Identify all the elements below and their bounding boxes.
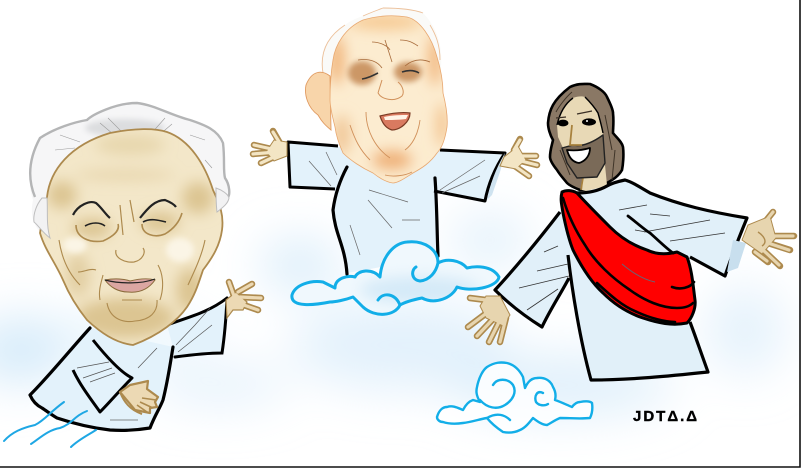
left robe trailing wind lines (4, 402, 96, 447)
top man cheek lines (350, 112, 420, 176)
signature: JDTΔ.Δ (633, 408, 699, 425)
left hand on chest (120, 381, 158, 414)
Jesus left sleeve (495, 212, 569, 327)
top man body lines (333, 167, 438, 274)
top man mouth (380, 113, 410, 130)
Jesus nose (570, 125, 582, 145)
top man nose (378, 80, 403, 100)
Jesus beard (562, 135, 605, 178)
left man mouth (105, 279, 155, 292)
top man ear (306, 72, 331, 130)
top man robe (287, 143, 505, 273)
top man hair (321, 8, 441, 75)
top man right hand (500, 139, 537, 176)
left robe body (30, 303, 227, 430)
Jesus sash folds (563, 198, 694, 322)
left man eyes and bags (76, 213, 182, 241)
top man sleeve outline left (288, 142, 338, 189)
Jesus red sash (561, 191, 695, 324)
figure: left flying man (4, 103, 261, 447)
top man sleeve right (434, 150, 505, 201)
cloud: lower small cloud (437, 362, 592, 433)
left man nose (116, 200, 144, 262)
Jesus face (557, 96, 603, 148)
left hand raised (226, 282, 261, 318)
Jesus right sleeve (577, 180, 747, 276)
Jesus neck (582, 165, 607, 192)
left man chin wrinkles (59, 240, 205, 322)
top man eyes (362, 71, 419, 79)
top man left hand (253, 131, 287, 163)
hair: white with grey outline (30, 103, 229, 240)
Jesus eyes (558, 120, 568, 126)
face: top man (330, 16, 447, 183)
left folded sleeve (73, 340, 132, 412)
background: pale blue haze (0, 215, 785, 417)
face: left man (40, 129, 223, 345)
hair tufts at temples (34, 188, 229, 238)
left man eyebrows (73, 200, 176, 218)
left raised sleeve (167, 298, 227, 357)
Jesus left hand (468, 296, 510, 342)
Jesus sleeve fold line (628, 216, 673, 253)
Jesus mouth (567, 148, 590, 163)
Jesus hair (548, 84, 623, 190)
Jesus right hand (742, 212, 794, 266)
left robe outline (30, 328, 173, 430)
Jesus robe body (495, 180, 747, 379)
cloud: under top man (292, 242, 499, 314)
figure: Jesus (468, 84, 794, 380)
figure: top centre man (253, 8, 537, 274)
